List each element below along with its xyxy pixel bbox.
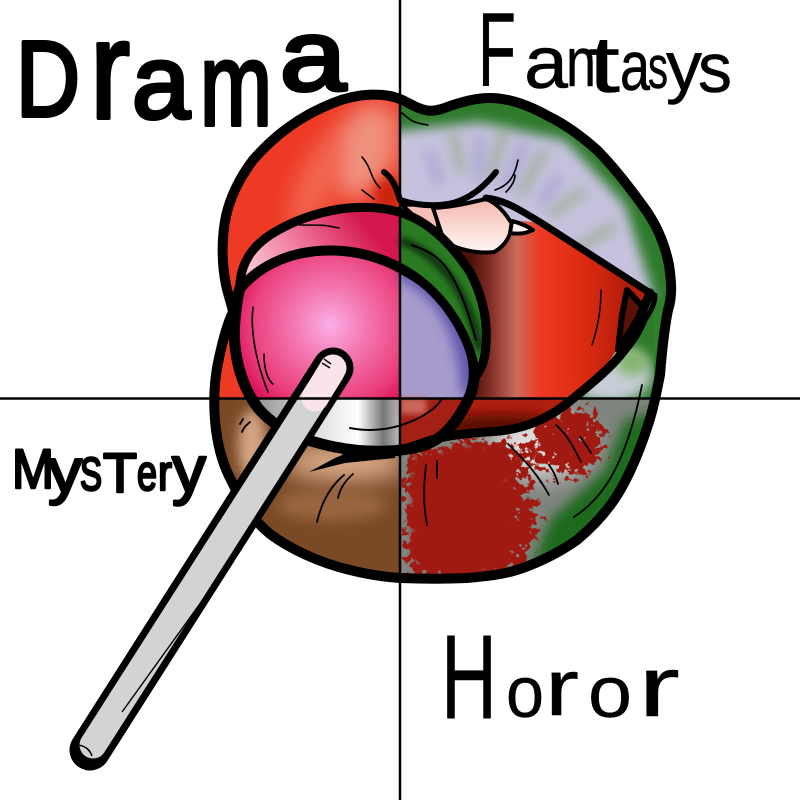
label: Fantasys: y: [666, 27, 702, 105]
lollipop: [229, 254, 480, 456]
blood splatter: [401, 400, 610, 574]
lollipop stick: [76, 359, 333, 756]
label: Mystery: M: [12, 437, 54, 500]
candy pink half: [240, 256, 399, 398]
lip colour quadrants: [219, 100, 666, 574]
label: Fantasys: s: [648, 34, 668, 101]
horror quadrant: grey and green with blood: [401, 400, 650, 574]
lower lip creases: [240, 385, 642, 525]
label: Horor: r: [545, 643, 579, 732]
sliver of red lower lip left of lollipop: [216, 345, 240, 398]
label: Mystery: e: [137, 445, 157, 501]
label: Fantasys: a: [524, 21, 569, 104]
label: Mystery: y: [48, 437, 82, 506]
label: Horor: r: [638, 640, 680, 735]
tongue body: [454, 220, 645, 431]
solid blood base: [412, 445, 512, 575]
tongue tip curl over lollipop: [230, 200, 495, 380]
label: Horor: o: [506, 653, 544, 733]
label: Fantasys: s: [698, 29, 732, 107]
label: Drama: a: [132, 24, 191, 141]
label: Mystery: r: [158, 445, 172, 501]
label: Fantasys: n: [566, 23, 596, 101]
label: Drama: m: [200, 19, 272, 151]
outer lip outline: [214, 95, 671, 579]
mystery quadrant: brown lip: [219, 400, 399, 573]
teeth: [402, 199, 533, 253]
label: Fantasys: t: [588, 20, 620, 109]
lips illustration: [76, 80, 684, 756]
label: Horor: o: [588, 653, 632, 733]
drama quadrant: red lip: [227, 100, 399, 398]
label: Drama: a: [280, 0, 346, 112]
fantasy quadrant: green and lavender lip: [401, 103, 666, 398]
label: Drama: D: [16, 18, 80, 139]
tongue shadow tip: [618, 290, 644, 350]
candy silver half: [258, 400, 399, 446]
lower lip spike: [309, 448, 395, 472]
label: Horor: H: [441, 610, 497, 744]
label: Mystery: T: [103, 441, 137, 504]
candy red half: [396, 394, 462, 444]
label: Mystery: y: [172, 432, 206, 506]
candy lavender half: [391, 270, 469, 398]
mouth ink lines and creases: [252, 113, 655, 458]
label: Fantasys: a: [620, 27, 650, 105]
label: Mystery: S: [80, 448, 102, 500]
